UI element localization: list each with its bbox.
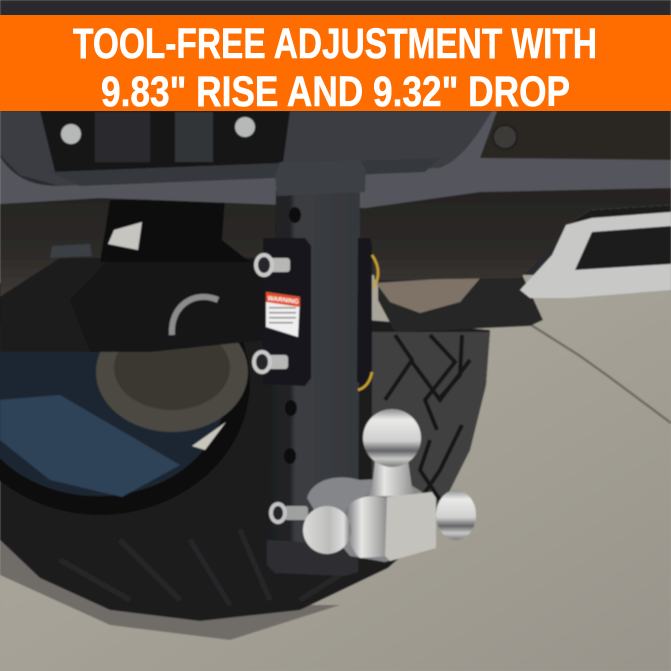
adjustable hitch post	[267, 160, 366, 576]
tire contact shadow	[0, 540, 340, 640]
post bottom cap	[267, 540, 358, 576]
square shank end	[385, 492, 436, 561]
yellow pins	[372, 255, 378, 287]
muddy spare part	[376, 276, 482, 313]
warning label: WARNING	[267, 295, 299, 306]
post top cap	[275, 160, 366, 196]
tri-ball mount	[303, 409, 476, 562]
rear tire	[0, 290, 490, 621]
front ball	[303, 506, 351, 554]
upper backdrop	[0, 0, 671, 275]
tool-free pins	[254, 255, 308, 522]
frame bracket	[50, 244, 92, 258]
grey bumper trim	[0, 111, 671, 208]
ground crack	[528, 323, 671, 423]
top ball neck	[365, 460, 420, 496]
front ball neck	[345, 496, 392, 558]
hitch receiver frame	[0, 258, 265, 352]
wheel rim	[0, 249, 250, 515]
dark hitch shelf	[378, 270, 543, 332]
truck bumper body	[0, 175, 671, 297]
safety hook	[172, 297, 218, 335]
lower tire tread detail	[60, 530, 340, 605]
wheel hub	[96, 312, 248, 432]
hitch cross member	[100, 198, 250, 262]
post holes	[289, 207, 301, 223]
headline	[73, 20, 597, 116]
receiver label	[108, 222, 142, 250]
tire tread block right of post	[372, 332, 490, 562]
headline: 9.83" RISE AND 9.32" DROP	[101, 68, 570, 116]
bracket plates	[263, 238, 378, 390]
right dark panel	[476, 111, 671, 162]
top truck panel	[0, 111, 671, 208]
tire tread grooves	[372, 335, 470, 500]
upper left tire tread	[0, 300, 110, 352]
warning label	[266, 292, 300, 337]
step ledge	[50, 158, 440, 186]
top ball	[363, 409, 421, 467]
license plate recess	[0, 111, 492, 186]
background: concrete ground	[0, 270, 671, 671]
bolts and sensor	[61, 124, 81, 144]
orange banner	[0, 15, 671, 116]
right ball	[436, 490, 476, 540]
chrome exhaust trim	[520, 205, 671, 298]
